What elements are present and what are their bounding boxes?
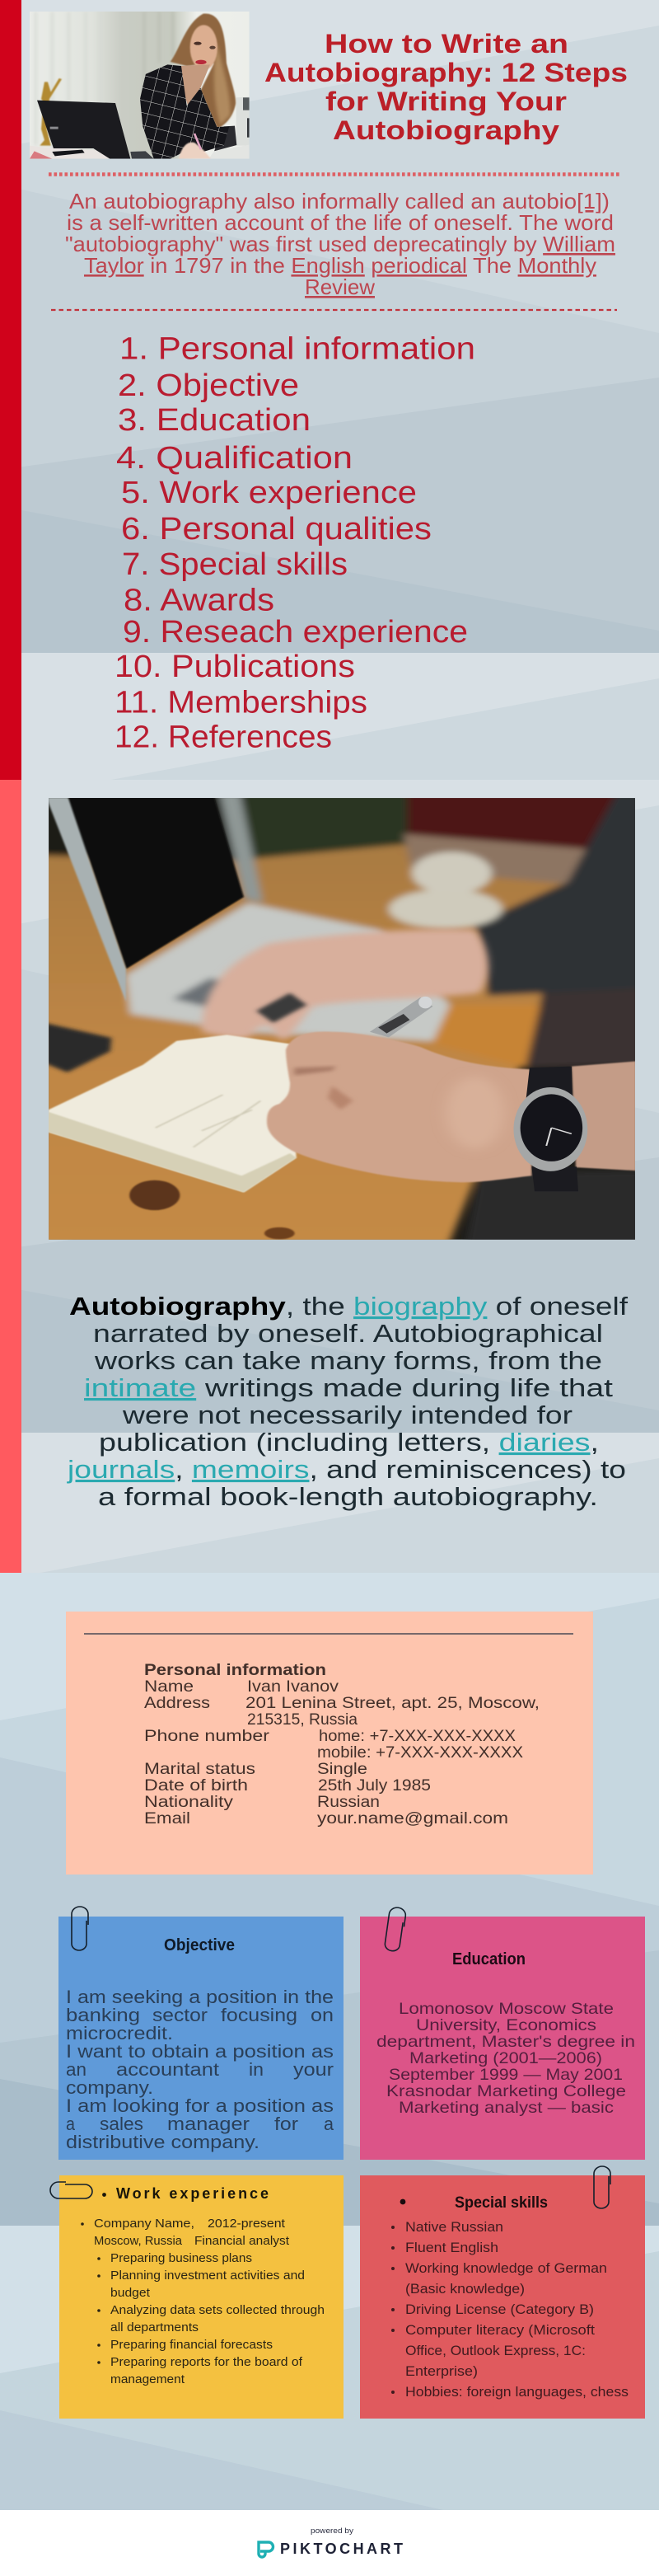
panel: work experience: Planning investment activities and bbox=[110, 2269, 305, 2283]
title: How to Write an bbox=[325, 29, 568, 59]
panel: special skills: Special skills bbox=[455, 2194, 548, 2212]
panel: personal information: 201 Lenina Street, apt. 25, Moscow, bbox=[245, 1695, 540, 1712]
icon: paperclip on work experience bbox=[50, 2182, 92, 2198]
panel: work experience bbox=[59, 2175, 344, 2419]
panel: personal information: home: +7-XXX-XXX-XXXX bbox=[319, 1728, 516, 1745]
panel: objective: for bbox=[274, 2114, 298, 2134]
icon: paperclip on education bbox=[384, 1907, 407, 1952]
panel: objective: sales bbox=[100, 2114, 143, 2134]
panel: personal information: Address bbox=[144, 1695, 210, 1712]
photo: hand writing in notebook bbox=[49, 798, 635, 1240]
panel: special skills: Hobbies: foreign languages, chess bbox=[405, 2384, 629, 2400]
list: 12 steps: 4. Qualification bbox=[116, 441, 353, 476]
panel: education: department, Master's degree in bbox=[376, 2033, 635, 2051]
list: 12 steps: 8. Awards bbox=[124, 584, 274, 618]
panel: objective: on bbox=[311, 2005, 334, 2025]
panel: work experience: Financial analyst bbox=[194, 2234, 290, 2248]
footer: powered by Piktochart: powered by bbox=[311, 2527, 353, 2536]
panel: work experience: budget bbox=[110, 2286, 151, 2300]
panel: work experience: management bbox=[110, 2372, 185, 2386]
panel: special skills: Computer literacy (Microsoft bbox=[405, 2322, 595, 2338]
intro text: An autobiography also informally called an autobio [1]) bbox=[69, 189, 610, 213]
list: 12 steps: 11. Memberships bbox=[115, 686, 367, 720]
panel: personal information: Single bbox=[317, 1761, 367, 1778]
panel: personal information: Ivan Ivanov bbox=[247, 1678, 339, 1696]
panel: objective: company. bbox=[66, 2077, 153, 2098]
panel: objective bbox=[58, 1917, 344, 2160]
panel: objective: microcredit. bbox=[66, 2023, 173, 2043]
footer: powered by Piktochart: PIKTOCHART bbox=[280, 2541, 403, 2557]
panel: objective: your bbox=[293, 2059, 334, 2080]
background: section 1 bbox=[0, 0, 659, 780]
panel: work experience: Company Name, bbox=[94, 2217, 194, 2231]
panel: objective: an bbox=[66, 2059, 86, 2080]
intro text bbox=[65, 189, 615, 299]
panel: special skills: (Basic knowledge) bbox=[405, 2281, 525, 2297]
panel: education: Lomonosov Moscow State bbox=[399, 2000, 614, 2018]
list: 12 steps: 9. Reseach experience bbox=[123, 615, 468, 650]
intro text: "autobiography" was first used deprecatingly by William bbox=[65, 232, 615, 256]
panel: special skills bbox=[360, 2175, 645, 2419]
panel: special skills: Driving License (Category B) bbox=[405, 2302, 594, 2317]
panel: objective: a bbox=[66, 2114, 76, 2134]
panel: education: Education bbox=[452, 1950, 526, 1968]
panel: personal information: your.name@gmail.com bbox=[317, 1810, 508, 1828]
list: 12 steps: 3. Education bbox=[118, 403, 311, 438]
panel: work experience: Analyzing data sets collected through bbox=[110, 2303, 325, 2317]
panel: special skills: Native Russian bbox=[405, 2219, 503, 2235]
panel: personal information: Date of birth bbox=[144, 1777, 248, 1795]
list: 12 steps: 6. Personal qualities bbox=[121, 512, 432, 547]
panel: work experience: 2012-present bbox=[208, 2217, 286, 2231]
panel: work experience: Preparing financial forecasts bbox=[110, 2338, 273, 2352]
panel: special skills: Office, Outlook Express, 1C: bbox=[405, 2343, 586, 2358]
autobiography paragraph: journals , memoirs , and reminiscences) to bbox=[67, 1455, 626, 1484]
autobiography paragraph bbox=[67, 1292, 628, 1511]
panel: education: Marketing analyst — basic bbox=[399, 2099, 614, 2117]
panel: objective: I want to obtain a position as bbox=[66, 2041, 334, 2062]
background: section 2 bbox=[0, 780, 659, 1573]
panel: education bbox=[360, 1917, 645, 2160]
red side bar bbox=[0, 0, 21, 780]
panel: personal information: Russian bbox=[317, 1794, 380, 1811]
panel: personal information: Personal information bbox=[144, 1662, 326, 1679]
panel: education: September 1999 — May 2001 bbox=[389, 2066, 623, 2084]
panel: personal information: Phone number bbox=[144, 1728, 270, 1745]
title bbox=[264, 29, 628, 145]
autobiography paragraph: narrated by oneself. Autobiographical bbox=[93, 1319, 603, 1348]
panel: objective: I am looking for a position as bbox=[66, 2095, 334, 2116]
list: 12 steps: 10. Publications bbox=[115, 650, 355, 684]
title: for Writing Your bbox=[325, 87, 567, 116]
intro text: Taylor in 1797 in the English periodical The Monthly bbox=[84, 253, 596, 278]
panel: objective: I am seeking a position in the bbox=[66, 1987, 334, 2007]
panel: objective: manager bbox=[167, 2114, 250, 2134]
panel: work experience: all departments bbox=[110, 2320, 199, 2334]
panel: work experience: Work experience bbox=[116, 2185, 269, 2202]
panel: objective: banking bbox=[66, 2005, 140, 2025]
panel: objective: distributive company. bbox=[66, 2132, 259, 2152]
list: 12 steps: 2. Objective bbox=[118, 368, 299, 403]
panel: education: Marketing (2001—2006) bbox=[409, 2049, 602, 2067]
panel: personal information: Nationality bbox=[144, 1794, 234, 1811]
list: 12 steps: 12. References bbox=[115, 720, 332, 755]
panel: education: University, Economics bbox=[416, 2016, 596, 2034]
icon: paperclip on objective bbox=[72, 1907, 88, 1950]
title: Autobiography bbox=[333, 115, 559, 145]
panel: personal information: Name bbox=[144, 1678, 194, 1696]
list: 12 steps: 5. Work experience bbox=[121, 476, 417, 510]
icon: paperclip on special skills bbox=[594, 2166, 610, 2208]
autobiography paragraph: works can take many forms, from the bbox=[94, 1346, 602, 1375]
panel: personal information: 215315, Russia bbox=[247, 1711, 358, 1729]
list: 12 steps: 1. Personal information bbox=[119, 331, 475, 366]
coral side bar bbox=[0, 780, 21, 1573]
background: section 3 bbox=[0, 1573, 659, 2510]
panel: objective: focusing bbox=[221, 2005, 297, 2025]
list: 12 steps: 7. Special skills bbox=[122, 547, 348, 582]
panel: objective: Objective bbox=[164, 1936, 235, 1954]
autobiography paragraph: publication (including letters, diaries , bbox=[99, 1428, 599, 1457]
autobiography paragraph: a formal book-length autobiography. bbox=[98, 1482, 598, 1511]
panel: objective: in bbox=[249, 2059, 264, 2080]
autobiography paragraph: intimate writings made during life that bbox=[84, 1373, 613, 1402]
panel: objective: a bbox=[324, 2114, 334, 2134]
panel: personal information: mobile: +7-XXX-XXX-XXXX bbox=[317, 1744, 523, 1762]
panel: personal information: 25th July 1985 bbox=[318, 1777, 431, 1795]
panel: education: Krasnodar Marketing College bbox=[386, 2082, 626, 2100]
panel: personal information: Marital status bbox=[144, 1761, 255, 1778]
intro text: is a self-written account of the life of oneself. The word bbox=[67, 210, 614, 235]
panel: special skills: Working knowledge of German bbox=[405, 2260, 607, 2276]
panel: work experience: Preparing business plans bbox=[110, 2251, 252, 2265]
panel: personal information: Email bbox=[144, 1810, 190, 1828]
list: 12 steps bbox=[115, 331, 475, 755]
title: Autobiography: 12 Steps bbox=[264, 58, 628, 87]
autobiography paragraph: were not necessarily intended for bbox=[122, 1401, 573, 1429]
panel: special skills: Enterprise) bbox=[405, 2363, 478, 2379]
photo: woman at laptop bbox=[30, 12, 250, 159]
footer: powered by Piktochart bbox=[0, 2510, 659, 2576]
intro text: Review bbox=[305, 274, 375, 299]
panel: special skills: Fluent English bbox=[405, 2240, 498, 2255]
panel: objective: sector bbox=[152, 2005, 208, 2025]
panel: objective: accountant bbox=[116, 2059, 219, 2080]
panel: work experience: Moscow, Russia bbox=[94, 2234, 183, 2248]
autobiography paragraph: Autobiography , the biography of oneself bbox=[69, 1292, 628, 1321]
panel: personal information bbox=[66, 1612, 593, 1875]
panel: work experience: Preparing reports for the board of bbox=[110, 2355, 303, 2369]
